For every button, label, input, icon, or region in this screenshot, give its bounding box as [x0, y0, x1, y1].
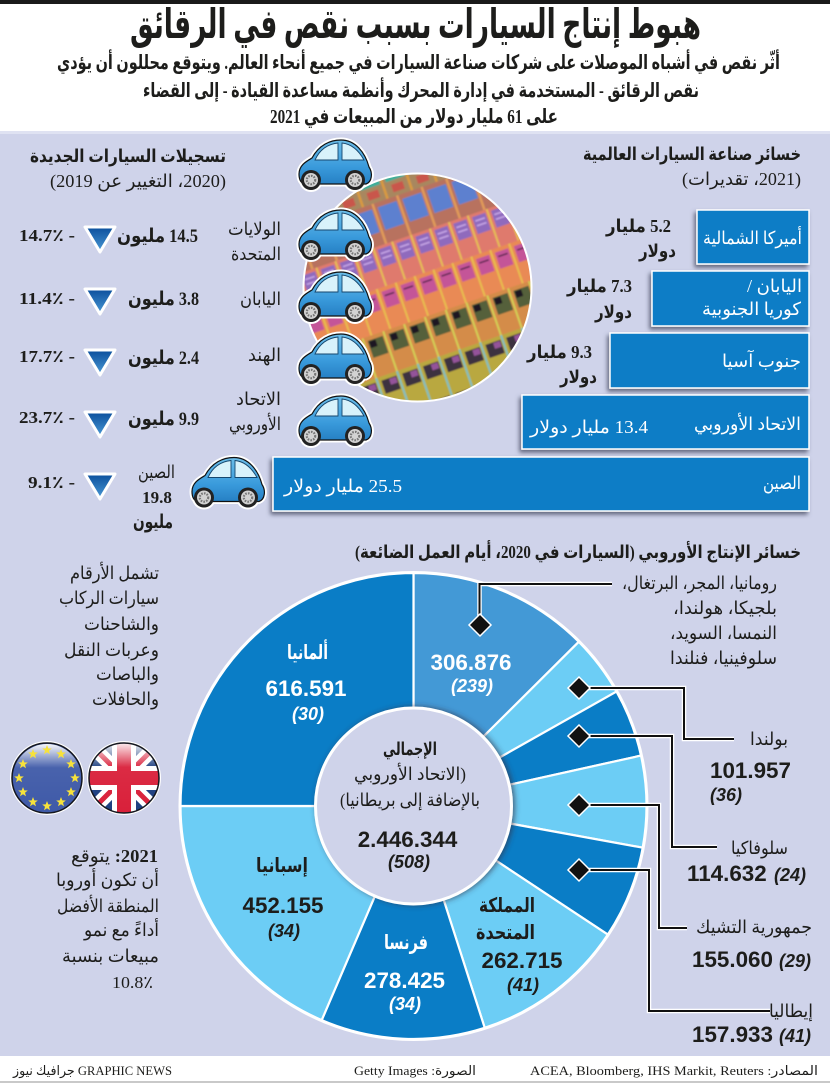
- slice: Germany: [180, 573, 414, 806]
- row: India: - 17.7٪: [19, 347, 75, 366]
- row: China: [28, 458, 264, 533]
- bar: European Union: 13.4 مليار دولار: [529, 417, 648, 438]
- slice: Slovakia: [499, 692, 641, 785]
- bar: European Union: الاتحاد الأوروبي: [694, 413, 801, 435]
- row: European Union: - 23.7٪: [19, 408, 75, 427]
- slice: others: [414, 573, 579, 737]
- label: Spain: [243, 855, 323, 941]
- bar: Japan / South Korea: دولار: [594, 302, 632, 323]
- row: European Union: [19, 389, 371, 448]
- label: Poland: 101.957: [710, 758, 791, 783]
- label: Germany: 616.591: [266, 676, 346, 701]
- note: figures include: سيارات الركاب: [59, 588, 159, 609]
- bar: South Asia: 9.3 مليار: [526, 342, 592, 362]
- heading: registrations: (2020، التغيير عن 2019): [50, 171, 226, 192]
- bar: North America: أميركا الشمالية: [703, 226, 802, 249]
- row: United States: [19, 210, 371, 264]
- label: Czech Republic: (29): [779, 951, 811, 971]
- icon: car decorative top: [299, 140, 371, 192]
- row: United States: المتحدة: [231, 244, 281, 264]
- slice: Poland: [483, 642, 616, 758]
- row: China: مليون: [133, 512, 173, 533]
- label: Poland: (36): [710, 785, 742, 805]
- image: silicon wafer circle: [302, 172, 532, 402]
- centre total: [340, 739, 480, 872]
- bar: Japan / South Korea: 7.3 مليار: [566, 276, 632, 296]
- slice: Czech Republic: [509, 756, 646, 848]
- row: United States: - 14.7٪: [19, 226, 75, 245]
- donut centre: [316, 708, 512, 904]
- row: China: الصين: [138, 462, 175, 483]
- row: India: 2.4 مليون: [128, 348, 199, 369]
- leader: Poland: [568, 677, 734, 739]
- note: figures include: [59, 562, 159, 710]
- label: other countries list: النمسا، السويد،: [670, 623, 777, 644]
- heading: registrations: [30, 146, 226, 192]
- row: Japan: [19, 272, 371, 324]
- leader: Italy: [568, 859, 770, 1011]
- bar: South Asia: جنوب آسيا: [722, 349, 801, 372]
- note: 2021 forecast: [56, 846, 159, 992]
- label: other countries list: سلوفينيا، فنلندا: [670, 648, 777, 669]
- centre total: (الاتحاد الأوروبي: [354, 763, 466, 785]
- label: France: 278.425: [364, 968, 445, 993]
- label: Poland: بولندا: [750, 729, 788, 750]
- row: Japan: - 11.4٪: [19, 289, 75, 308]
- leader: others: [469, 584, 612, 636]
- footer: [0, 1056, 830, 1083]
- note: 2021 forecast: مبيعات بنسبة: [62, 946, 159, 966]
- header: [0, 0, 830, 134]
- centre total: بالإضافة إلى بريطانيا): [340, 790, 480, 811]
- credit: sources: المصادر: ACEA, Bloomberg, IHS Markit, Reuters: [530, 1063, 818, 1079]
- label: Italy: 157.933: [692, 1022, 773, 1047]
- credit: photo: الصورة: Getty Images: [354, 1063, 476, 1079]
- label: Italy: (41): [779, 1026, 811, 1046]
- bar: Japan / South Korea: [566, 271, 809, 326]
- label: other countries list: رومانيا، المجر، البرتغال،: [622, 573, 777, 594]
- label: Poland: [710, 729, 791, 805]
- label: Slovakia: (24): [774, 865, 806, 885]
- heading: registrations: تسجيلات السيارات الجديدة: [30, 146, 226, 166]
- slice: Spain: [180, 806, 375, 1020]
- subtitle: [57, 48, 780, 129]
- note: figures include: والحافلات: [92, 689, 159, 710]
- label: others value: [431, 650, 511, 696]
- label: Slovakia: 114.632: [687, 861, 767, 886]
- label: Czech Republic: 155.060: [692, 947, 773, 972]
- label: other countries list: بلجيكا، هولندا،: [673, 598, 777, 619]
- note: figures include: والشاحنات: [84, 614, 159, 635]
- leader: Czech Republic: [568, 794, 687, 928]
- label: France: [364, 932, 445, 1014]
- leader: Slovakia: [568, 725, 717, 847]
- note: 2021 forecast: 2021: يتوقع: [71, 846, 158, 867]
- label: United Kingdom: 262.715: [482, 948, 562, 973]
- label: Spain: 452.155: [243, 893, 323, 918]
- note: figures include: تشمل الأرقام: [70, 562, 159, 583]
- heading: losses: (2021، تقديرات): [682, 169, 801, 190]
- row: India: [19, 334, 371, 386]
- subtitle: على 61 مليار دولار من المبيعات في 2021: [270, 106, 558, 129]
- bar: Japan / South Korea: كوريا الجنوبية: [702, 299, 801, 320]
- label: others value: (239): [451, 676, 493, 696]
- bar: Japan / South Korea: اليابان /: [747, 276, 802, 296]
- panel: global automaker losses: [273, 144, 809, 511]
- label: Germany: ألمانيا: [287, 638, 328, 664]
- label: Germany: (30): [292, 704, 324, 724]
- bar: European Union: [522, 395, 809, 449]
- centre total: (508): [388, 852, 430, 872]
- row: United States: الولايات: [228, 219, 281, 240]
- label: others value: 306.876: [431, 650, 511, 675]
- label: Spain: إسبانيا: [256, 855, 308, 877]
- bar: North America: دولار: [638, 241, 676, 262]
- slice: France: [322, 896, 485, 1039]
- row: European Union: الاتحاد: [236, 389, 281, 409]
- slice: United Kingdom: [444, 860, 608, 1028]
- note: 2021 forecast: أن تكون أوروبا: [56, 868, 159, 891]
- bar: North America: 5.2 مليار: [605, 216, 671, 236]
- donut chart: European production losses: [178, 571, 648, 1041]
- label: Slovakia: سلوفاكيا: [731, 838, 788, 859]
- row: European Union: 9.9 مليون: [128, 409, 199, 430]
- row: United States: 14.5 مليون: [117, 226, 198, 247]
- note: figures include: وعربات النقل: [64, 640, 159, 661]
- label: United Kingdom: [476, 895, 562, 995]
- note: 2021 forecast: 10.8٪: [112, 973, 153, 992]
- note: figures include: والباصات: [96, 664, 159, 685]
- label: United Kingdom: المتحدة: [476, 922, 535, 944]
- credit: Graphic News: GRAPHIC NEWS جرافيك نيوز: [12, 1063, 172, 1079]
- bar: China: الصين: [763, 473, 801, 494]
- panel: new car registrations: [19, 140, 371, 533]
- bar: South Asia: [526, 333, 809, 388]
- label: Czech Republic: [692, 917, 812, 972]
- bar: China: 25.5 مليار دولار: [283, 476, 402, 497]
- heading: losses: [583, 144, 801, 190]
- label: United Kingdom: المملكة: [479, 895, 535, 917]
- label: United Kingdom: (41): [507, 975, 539, 995]
- label: Spain: (34): [268, 921, 300, 941]
- slice: Italy: [495, 824, 643, 935]
- note: 2021 forecast: المنطقة الأفضل: [57, 895, 159, 916]
- label: Germany: [266, 638, 346, 724]
- label: Italy: [692, 1001, 813, 1047]
- note: 2021 forecast: أداءً مع نمو: [83, 918, 159, 941]
- icon: EU flag: [10, 741, 84, 815]
- row: European Union: الأوروبي: [229, 413, 281, 435]
- label: other countries list: [622, 573, 777, 669]
- centre total: 2.446.344: [358, 827, 458, 852]
- row: Japan: 3.8 مليون: [128, 289, 199, 310]
- label: Italy: إيطاليا: [769, 1001, 813, 1021]
- icon: UK flag: [87, 741, 161, 815]
- label: Czech Republic: جمهورية التشيك: [696, 917, 812, 938]
- row: Japan: اليابان: [240, 289, 281, 309]
- bar: North America: [605, 210, 809, 264]
- bar: China: [273, 457, 809, 511]
- row: China: - 9.1٪: [28, 473, 75, 492]
- centre total: الإجمالي: [383, 739, 437, 760]
- row: India: الهند: [248, 345, 281, 366]
- bar: South Asia: دولار: [559, 367, 597, 388]
- row: China: 19.8: [142, 488, 172, 507]
- label: Slovakia: [687, 838, 806, 886]
- label: France: فرنسا: [384, 932, 428, 954]
- label: France: (34): [389, 994, 421, 1014]
